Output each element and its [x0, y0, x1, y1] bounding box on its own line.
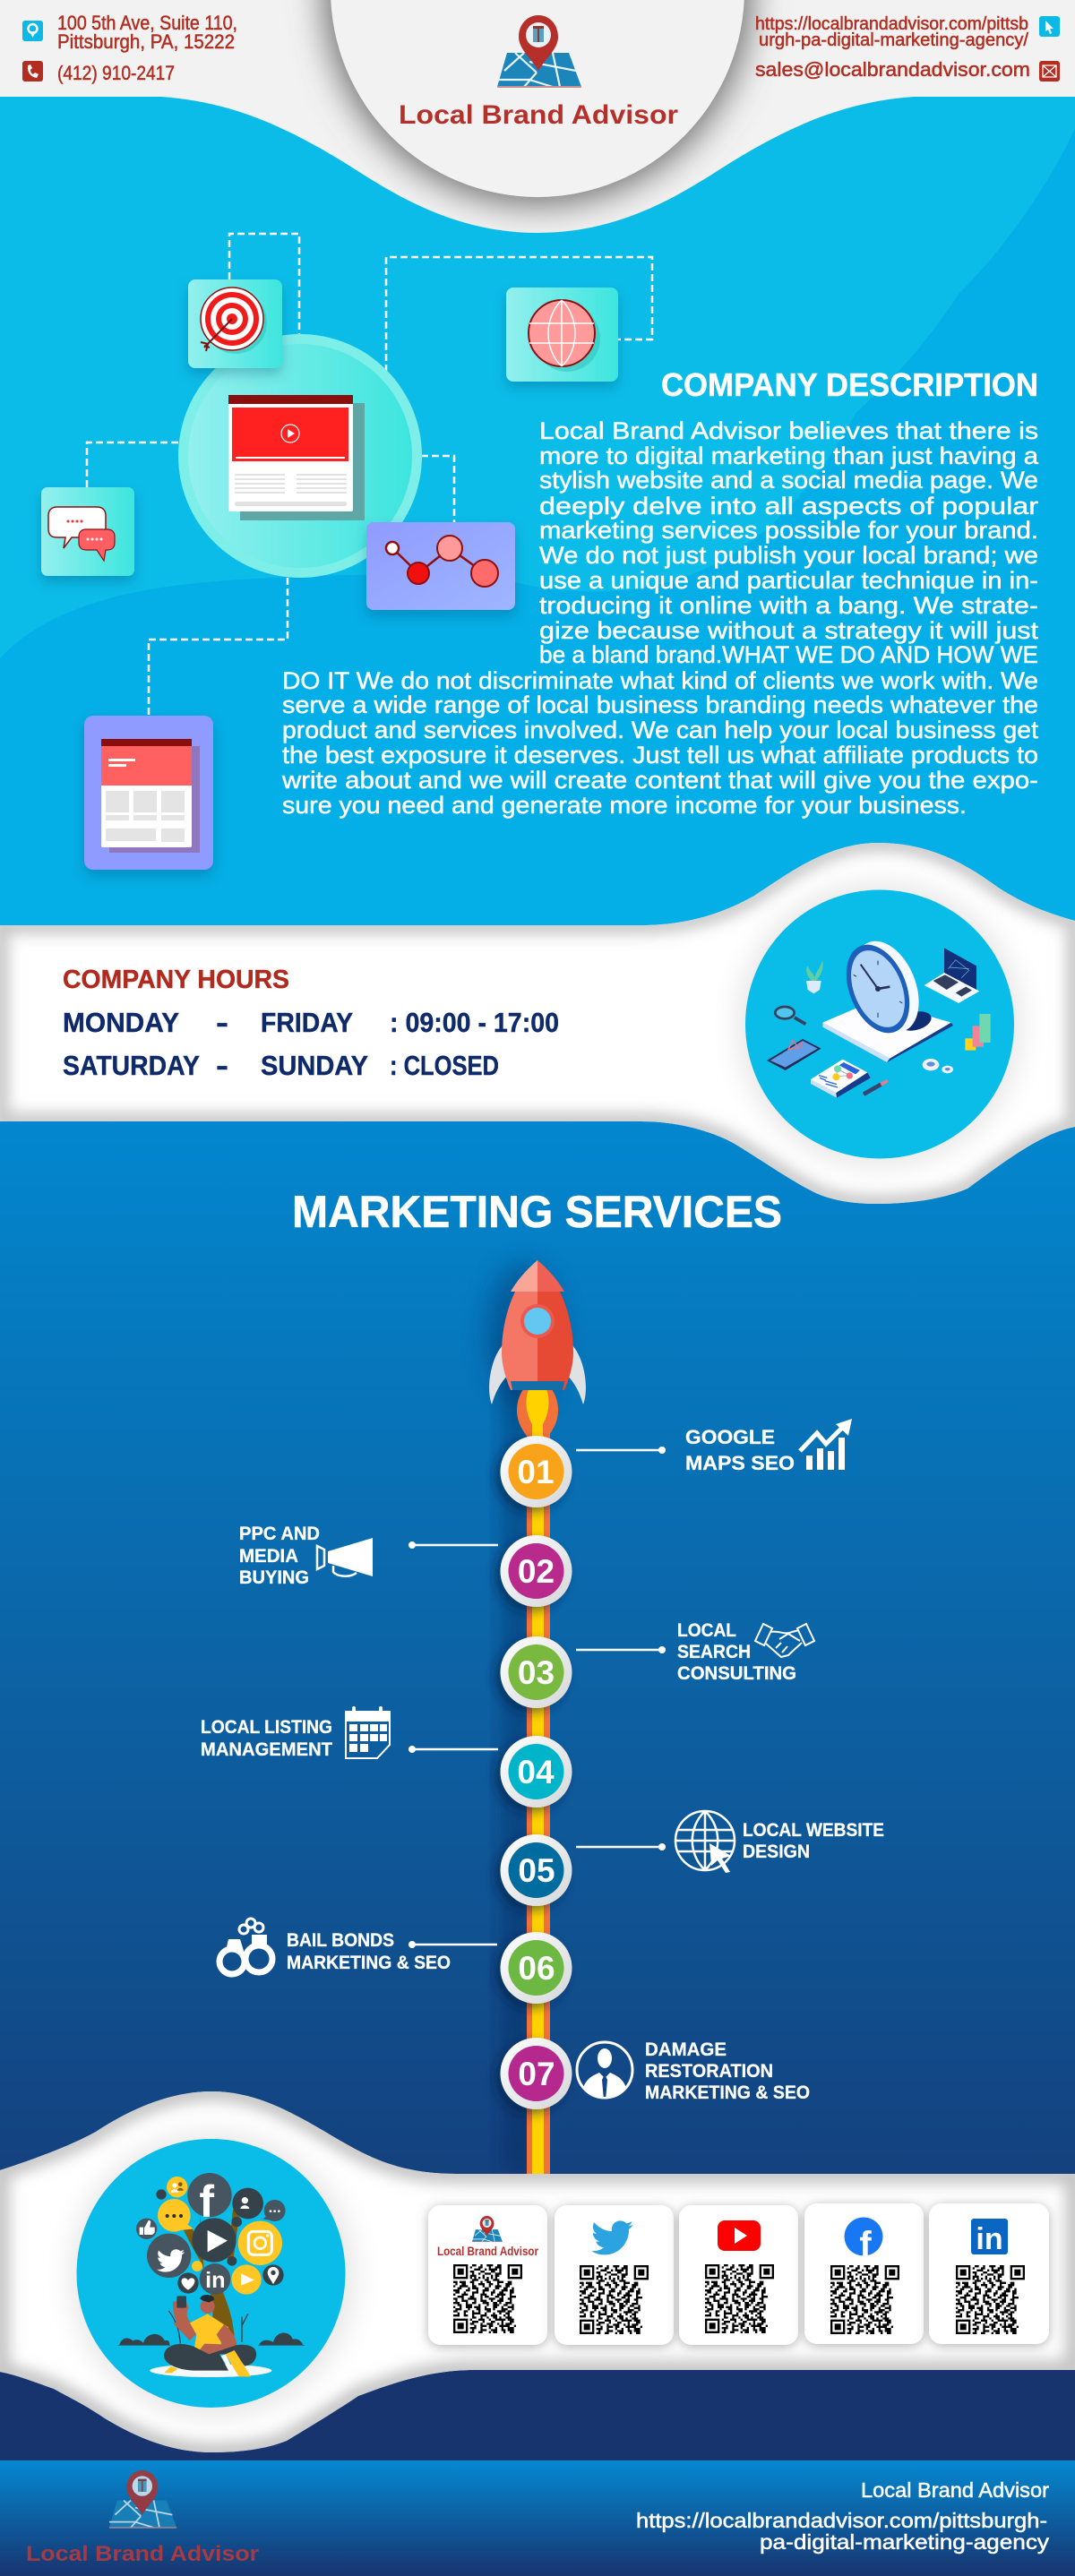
label: CONSULTING	[677, 1663, 796, 1684]
label: MARKETING & SEO	[287, 1953, 451, 1973]
weekend hours row	[63, 1050, 499, 1081]
connector	[576, 1843, 666, 1850]
icon: handshake	[755, 1624, 814, 1657]
company description text: deeply delve into all aspects of popular	[539, 493, 1038, 519]
gears	[923, 1059, 953, 1073]
weekend hours row: SUNDAY	[261, 1050, 368, 1081]
label: LOCAL LISTING	[201, 1717, 332, 1738]
footer contact text: pa-digital-marketing-agency	[760, 2530, 1050, 2554]
QR card 1: website: Local Brand Advisor	[437, 2244, 538, 2258]
background: top cyan section	[0, 90, 1075, 985]
company description text: be a bland brand.WHAT WE DO AND HOW WE	[539, 641, 1038, 668]
email address: sales@localbrandadvisor.com	[755, 58, 1030, 81]
footer contact text: Local Brand Advisor	[861, 2478, 1049, 2502]
icon: businessman	[577, 2042, 632, 2100]
company description text: We do not just publish your local brand; we	[539, 542, 1038, 569]
card: chat bubbles	[41, 487, 134, 576]
calendar base	[822, 1000, 953, 1062]
icon: handcuffs	[219, 1919, 272, 1974]
header wave panel	[0, 0, 1075, 242]
bubble glyphs: in	[205, 2268, 226, 2293]
label	[685, 1426, 795, 1474]
rocket body	[502, 1260, 538, 1390]
icon: megaphone	[317, 1538, 373, 1576]
label: MAPS SEO	[685, 1452, 795, 1474]
label: LOCAL	[677, 1620, 736, 1641]
rocket window	[520, 1304, 555, 1338]
company description text: product and services involved. We can help your local business get	[282, 717, 1039, 743]
rocket	[486, 1260, 586, 1436]
phone number: (412) 910-2417	[57, 62, 175, 84]
icon: cursor	[1039, 16, 1060, 37]
connector	[576, 1646, 666, 1653]
footer contact text	[636, 2478, 1050, 2554]
header address	[22, 12, 237, 84]
connector	[408, 1541, 498, 1549]
label: DAMAGE	[645, 2039, 727, 2060]
wall clock	[834, 932, 932, 1043]
heading: marketing services: MARKETING SERVICES	[292, 1187, 782, 1237]
node 06	[500, 1932, 572, 2004]
icon: calendar	[346, 1706, 391, 1758]
footer logo	[26, 2470, 259, 2566]
icon: globe with cursor	[675, 1811, 735, 1873]
label: BAIL BONDS	[287, 1930, 394, 1951]
company description text: serve a wide range of local business branding needs whatever the	[282, 691, 1038, 718]
laptop	[924, 948, 979, 1003]
weekday hours row: : 09:00 - 17:00	[390, 1007, 559, 1038]
bubble glyphs: f	[199, 2177, 214, 2227]
label: GOOGLE	[685, 1426, 775, 1448]
node 04	[500, 1736, 572, 1807]
browser window with video	[228, 395, 365, 520]
company description text: more to digital marketing than just having a	[539, 442, 1039, 469]
connector	[576, 1447, 666, 1454]
label: PPC AND	[239, 1524, 320, 1544]
label: DESIGN	[743, 1842, 810, 1862]
company description text: the best exposure it deserves. Just tell us what affiliate products to	[282, 742, 1038, 769]
tree trunk	[182, 2210, 239, 2338]
background: marketing services gradient	[0, 1075, 1075, 2374]
company description text: troducing it online with a bang. We strate-	[539, 592, 1038, 619]
weekend hours row: -	[216, 1050, 228, 1081]
rocket fins	[489, 1344, 586, 1404]
background: navy strip	[0, 2365, 1075, 2463]
label: RESTORATION	[645, 2061, 773, 2082]
node 07: 07	[518, 2056, 555, 2092]
node 04: 04	[517, 1754, 555, 1790]
panel: social band	[0, 2087, 1075, 2459]
company description text: marketing services possible for your brand.	[539, 517, 1038, 544]
company description text: stylish website and a social media page. We	[539, 467, 1038, 494]
QR card 5: linkedin	[929, 2203, 1049, 2344]
connector	[408, 1941, 497, 1948]
logo wordmark: Local Brand Advisor	[399, 100, 678, 130]
node 07	[500, 2038, 572, 2109]
bar chart	[965, 1014, 991, 1051]
company description text: write about and we will create content that will give you the expo-	[281, 767, 1038, 794]
weekday hours row: MONDAY	[63, 1007, 179, 1038]
step 02	[239, 1524, 572, 1607]
magnifier	[775, 1007, 805, 1024]
step 01	[500, 1419, 852, 1507]
node 01	[500, 1436, 572, 1507]
timeline line	[507, 1344, 550, 2174]
website url: urgh-pa-digital-marketing-agency/	[759, 30, 1028, 50]
address text: Pittsburgh, PA, 15222	[57, 30, 235, 53]
bubble glyphs	[140, 2177, 280, 2293]
node 03	[500, 1636, 572, 1708]
rocket flame	[517, 1389, 558, 1436]
weekend hours row: SATURDAY	[63, 1050, 200, 1081]
company description text	[281, 417, 1039, 819]
card: target icon	[188, 279, 282, 368]
pen	[864, 1081, 888, 1095]
icon: growth chart	[800, 1419, 852, 1470]
illustration: clock circle	[745, 890, 1014, 1159]
label: LOCAL WEBSITE	[743, 1820, 884, 1841]
step 07	[500, 2038, 810, 2109]
card: web page layout	[84, 716, 213, 870]
node 02: 02	[518, 1553, 555, 1590]
QR card 5: linkedin: in	[976, 2222, 1003, 2256]
company description text: Local Brand Advisor believes that there is	[539, 417, 1038, 444]
QR card 3: youtube	[679, 2205, 798, 2345]
illustration: social media tree	[77, 2139, 346, 2408]
node 03: 03	[518, 1654, 555, 1691]
label	[287, 1930, 451, 1973]
label: SEARCH	[677, 1642, 751, 1662]
node 05: 05	[518, 1852, 555, 1889]
weekday hours row: FRIDAY	[261, 1007, 353, 1038]
logo	[399, 15, 678, 130]
header website and email	[755, 14, 1060, 82]
dashed connectors	[87, 234, 652, 716]
label: MEDIA	[239, 1546, 298, 1567]
step 05	[500, 1811, 884, 1906]
address text: 100 5th Ave, Suite 110,	[57, 12, 237, 34]
social bubbles	[136, 2173, 286, 2295]
QR card 2: twitter	[555, 2205, 674, 2345]
panel: company hours band	[0, 833, 1075, 1209]
document	[811, 1060, 871, 1098]
step 03	[500, 1620, 814, 1708]
card: connected nodes	[366, 522, 515, 610]
label: BUYING	[239, 1567, 309, 1588]
label: MARKETING & SEO	[645, 2082, 810, 2103]
footer panel	[0, 2460, 1075, 2576]
step 06	[219, 1919, 572, 2004]
company description text: use a unique and particular technique in in-	[539, 567, 1038, 594]
smartphone	[767, 1039, 821, 1070]
illustration: central circle	[178, 334, 422, 578]
heading: company hours: COMPANY HOURS	[63, 966, 289, 994]
footer logo: Local Brand Advisor	[26, 2542, 259, 2566]
address text	[57, 12, 237, 53]
node 05	[500, 1834, 572, 1906]
label: MANAGEMENT	[201, 1739, 332, 1760]
node 01: 01	[517, 1454, 555, 1490]
weekday hours row: -	[216, 1007, 228, 1038]
footer contact text: https://localbrandadvisor.com/pittsburgh-	[636, 2509, 1047, 2532]
label	[743, 1820, 884, 1862]
icon: mail	[1039, 61, 1060, 82]
QR card 4: facebook: f	[859, 2225, 872, 2264]
label	[239, 1524, 320, 1588]
person with phone	[118, 2295, 305, 2377]
website url: https://localbrandadvisor.com/pittsb	[755, 14, 1028, 34]
step 04	[201, 1706, 572, 1807]
label	[201, 1717, 332, 1760]
icon: phone	[22, 61, 43, 82]
icon: location	[22, 21, 43, 41]
node 02	[500, 1535, 572, 1607]
label	[645, 2039, 810, 2103]
company description text: gize because without a strategy it will just	[539, 617, 1039, 644]
weekday hours row	[63, 1007, 559, 1038]
company description text: DO IT We do not discriminate what kind of clients we work with. We	[282, 667, 1038, 694]
label	[677, 1620, 796, 1684]
QR card 1: website	[428, 2205, 547, 2345]
plant	[806, 960, 823, 993]
weekend hours row: : CLOSED	[390, 1050, 499, 1081]
connector	[408, 1746, 498, 1753]
company description text: sure you need and generate more income for your business.	[282, 792, 967, 819]
QR card 4: facebook	[804, 2203, 924, 2344]
website url	[755, 14, 1028, 50]
heading: company description: COMPANY DESCRIPTION	[661, 366, 1038, 403]
node 06: 06	[518, 1950, 555, 1987]
card: globe icon	[506, 288, 618, 382]
